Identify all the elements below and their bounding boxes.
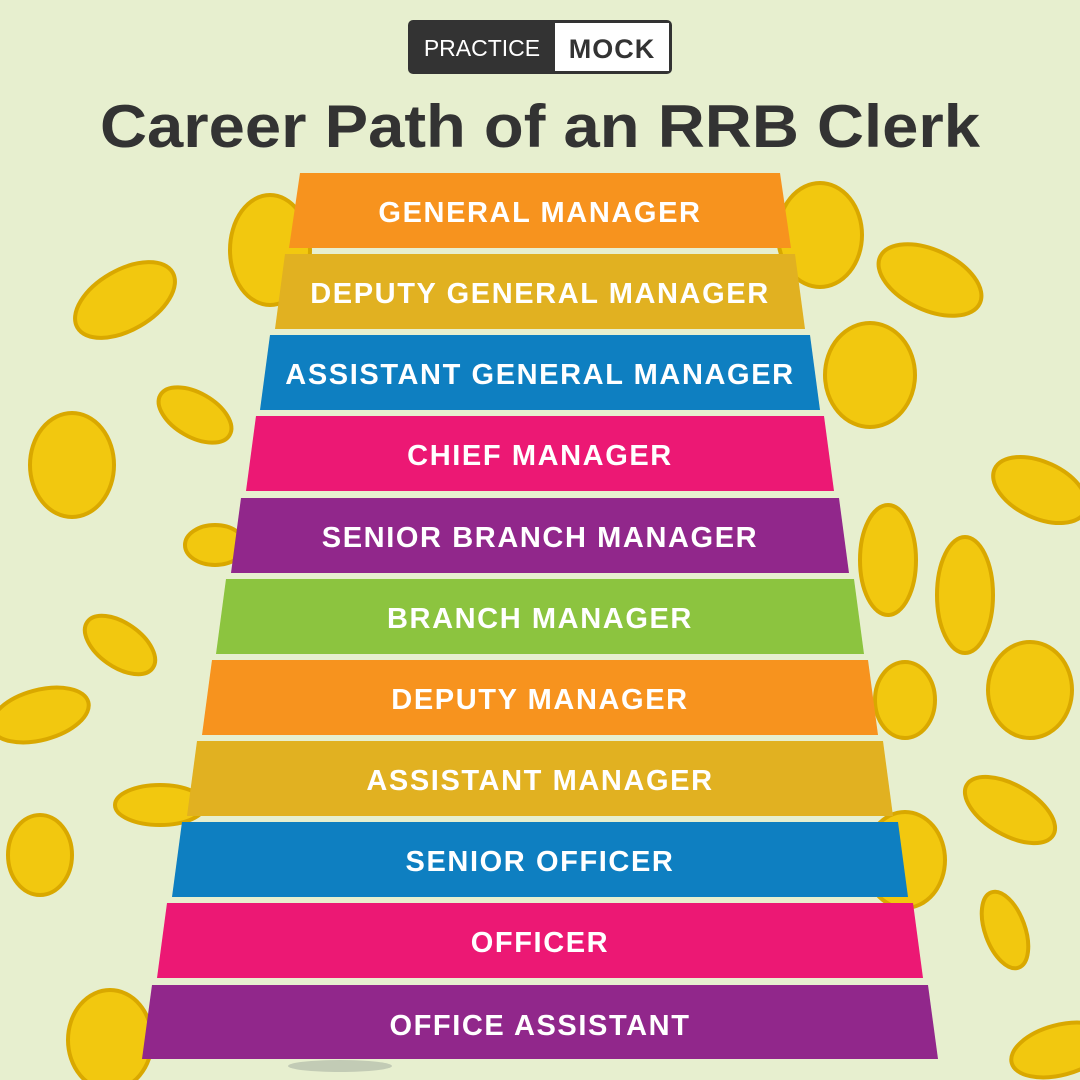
bar: deputy manager: DEPUTY MANAGER (391, 684, 689, 716)
bar: assistant manager: ASSISTANT MANAGER (366, 765, 714, 797)
bar: senior officer (172, 822, 908, 897)
bar: officer (157, 903, 923, 978)
logo (408, 20, 672, 74)
bar: senior branch manager (231, 498, 849, 573)
bar: branch manager: BRANCH MANAGER (387, 603, 693, 635)
shadow (288, 1060, 392, 1072)
bar: branch manager (216, 579, 864, 654)
bar: deputy general manager: DEPUTY GENERAL MANAGER (310, 278, 770, 310)
bar: senior branch manager: SENIOR BRANCH MANAGER (322, 522, 758, 554)
bar: officer: OFFICER (471, 927, 609, 959)
bar: deputy manager (202, 660, 878, 735)
logo: PRACTICE (424, 35, 540, 61)
bar: senior officer: SENIOR OFFICER (406, 846, 674, 878)
bar: deputy general manager (275, 254, 805, 329)
bar: assistant manager (187, 741, 893, 816)
bar: assistant general manager (260, 335, 820, 410)
bar: chief manager (246, 416, 834, 491)
title: Career Path of an RRB Clerk (100, 93, 981, 160)
logo: MOCK (569, 34, 655, 64)
bar: general manager: GENERAL MANAGER (378, 197, 702, 229)
bar: office assistant: OFFICE ASSISTANT (389, 1010, 691, 1042)
bar: office assistant (142, 985, 938, 1059)
bar: assistant general manager: ASSISTANT GENERAL MANAGER (285, 359, 795, 391)
ladder (142, 173, 938, 1059)
bar: general manager (289, 173, 791, 248)
bar: chief manager: CHIEF MANAGER (407, 440, 673, 472)
